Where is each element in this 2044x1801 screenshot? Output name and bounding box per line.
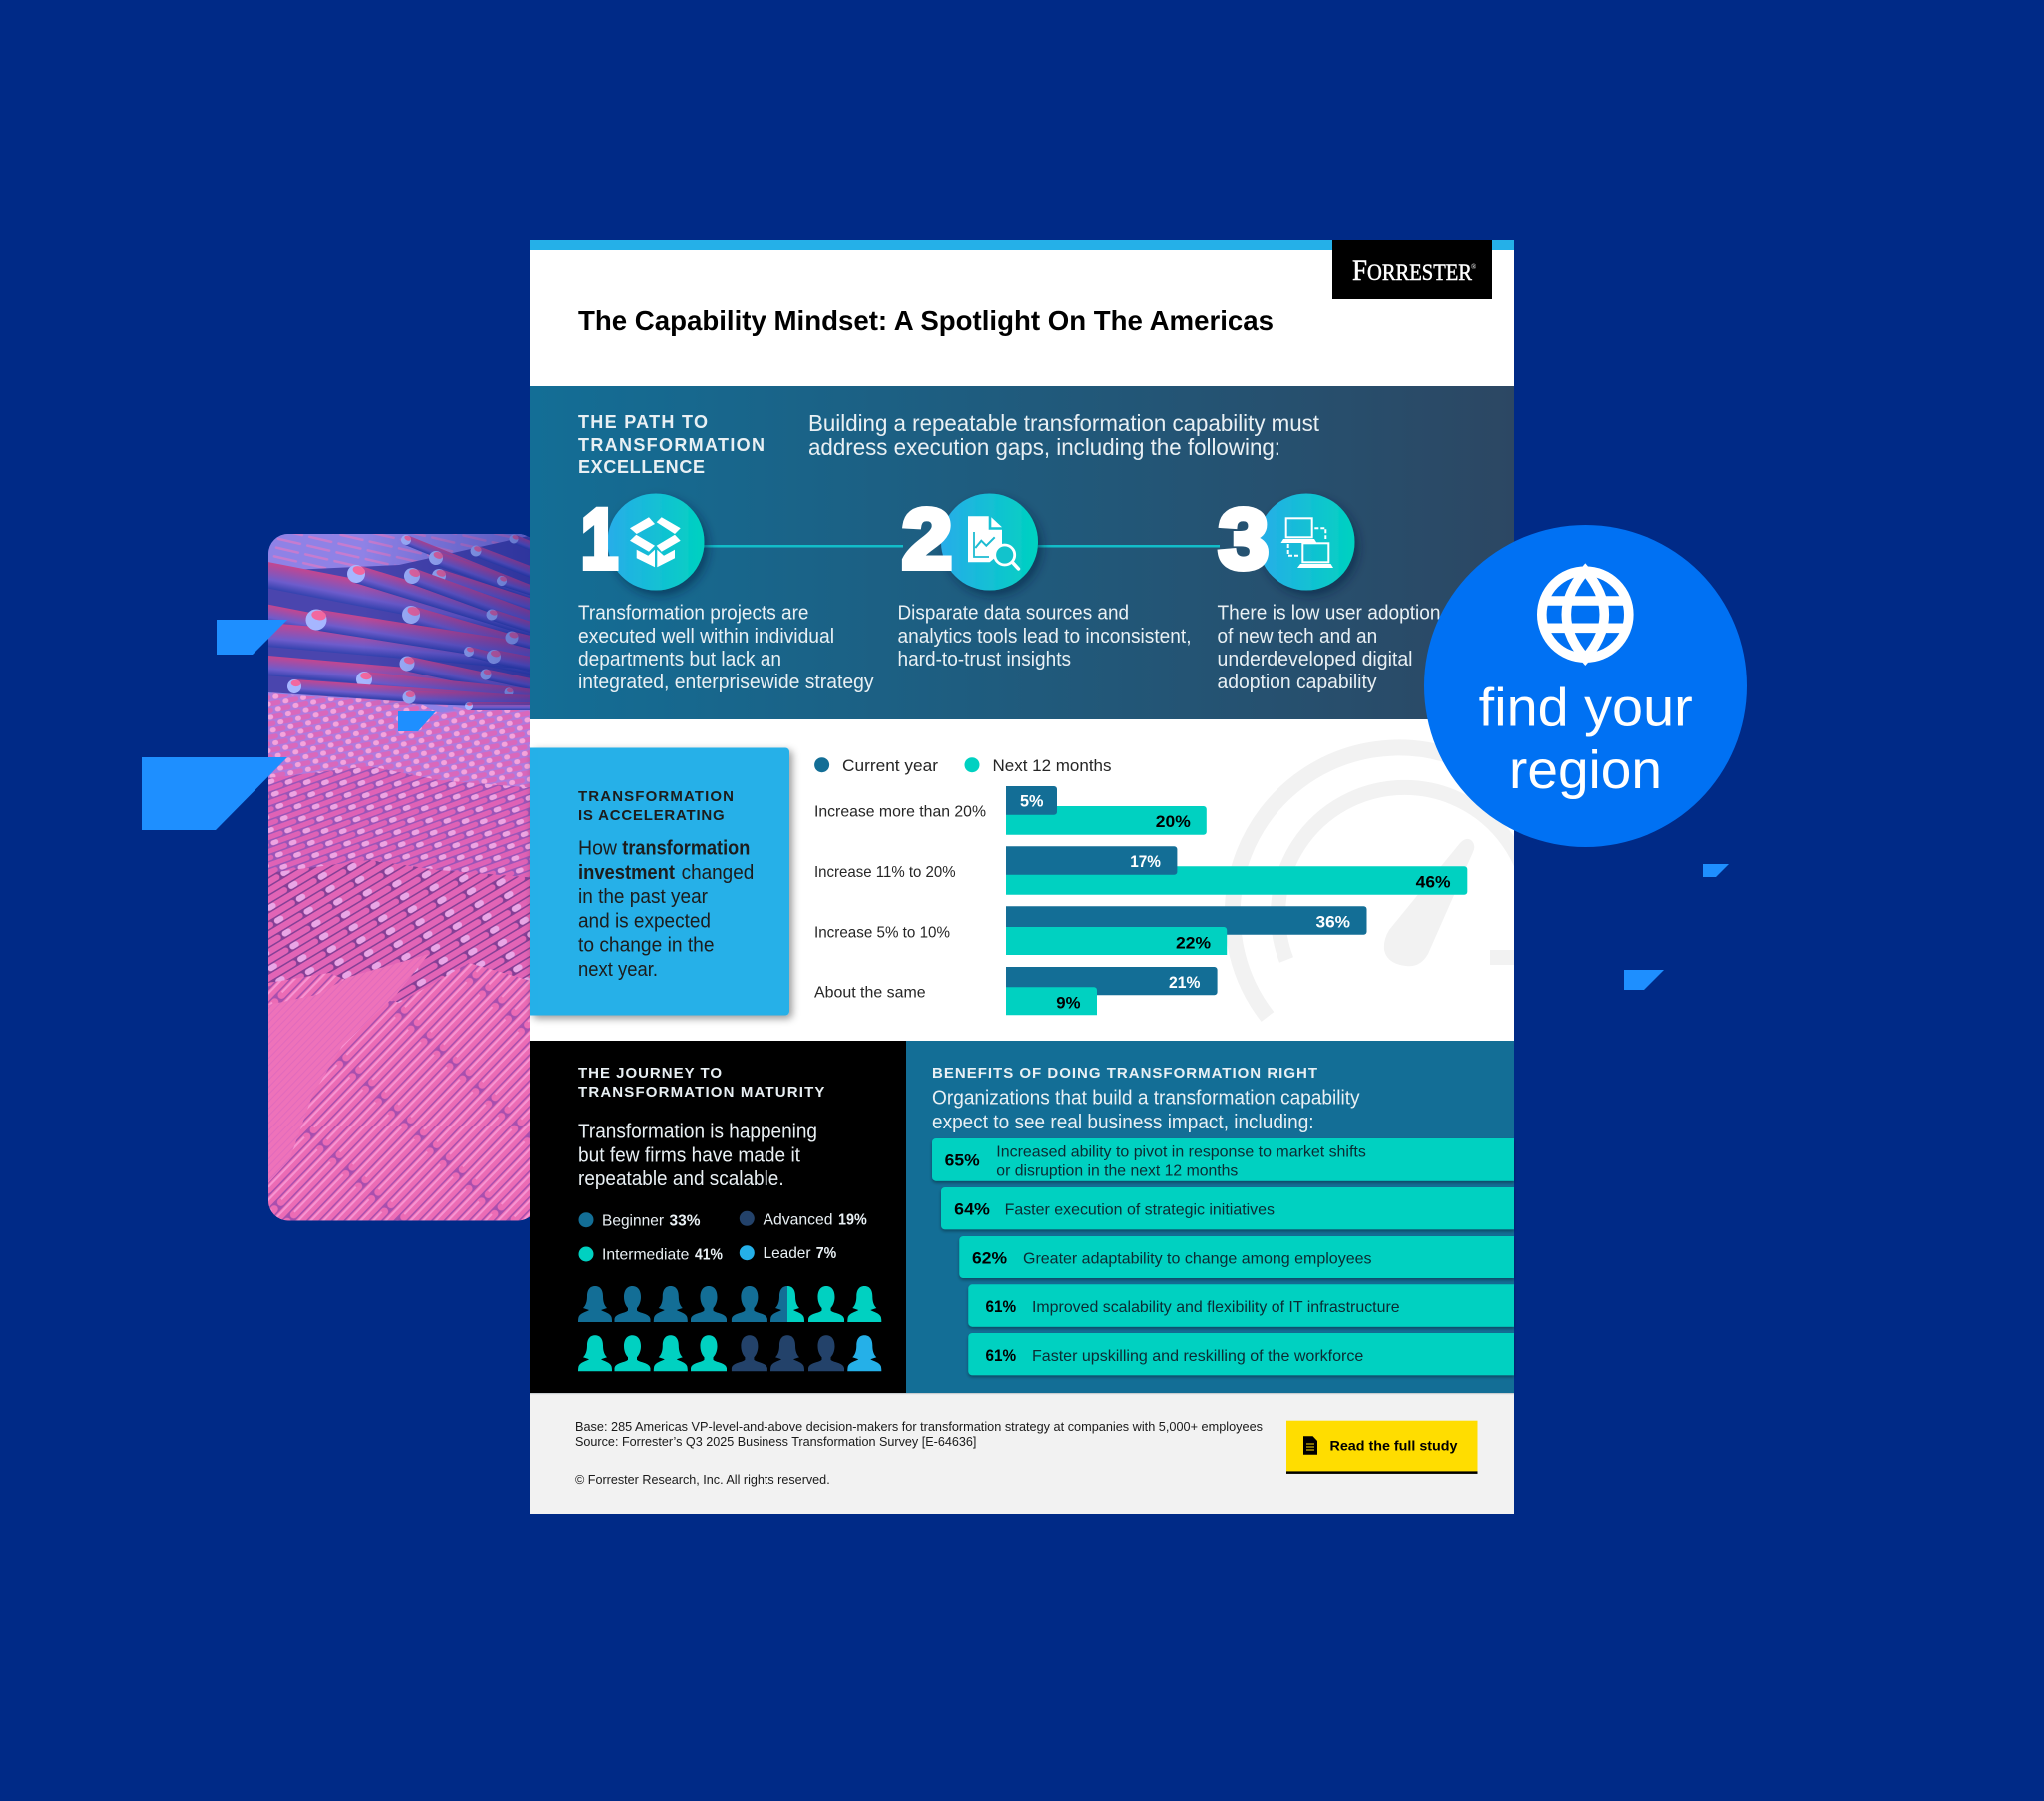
report card [530,240,1566,1514]
step 3 number: 3 [1219,492,1269,586]
people pictogram [578,1286,881,1371]
panel: benefits of doing transformation right [906,1041,1514,1394]
benefit 61% scalability: Improved scalability and flexibility of IT infrastructure [1032,1299,1400,1316]
footnotes: Base: 285 Americas VP-level-and-above decision-makers for transformation strategy at companies with 5,000+ employees [575,1420,1263,1434]
panel heading: TRANSFORMATION [578,788,734,805]
title: The Capability Mindset: A Spotlight On The Americas [578,305,1274,336]
benefit 65%: or disruption in the next 12 months [996,1162,1238,1179]
maturity legend: Beginner [602,1212,665,1229]
benefit 61% scalability [968,1284,1514,1327]
panel heading: THE PATH TO [578,412,708,432]
step 3 text: of new tech and an [1218,626,1377,648]
maturity legend: 7% [816,1245,836,1262]
step 1 text: Transformation projects are [578,603,808,625]
row: increase 5% to 10% [1006,906,1367,955]
panel body text: repeatable and scalable. [578,1168,784,1190]
panel intro text: expect to see real business impact, including: [932,1112,1314,1133]
panel body text [578,1122,817,1190]
step 2 number: 2 [902,492,952,586]
step 1 text [578,603,874,693]
panel: path to transformation excellence [530,386,1514,719]
row: increase more than 20%: 5% [1020,792,1044,811]
decorative blue arrow shapes left [142,620,436,830]
benefit 61% scalability: 61% [986,1297,1016,1316]
step 1 text: integrated, enterprisewide strategy [578,672,874,693]
infographic page [142,240,1747,1514]
panel: journey to transformation maturity [530,1041,906,1394]
panel heading: IS ACCELERATING [578,807,725,824]
benefit 62%: 62% [972,1248,1007,1267]
category labels: Increase 5% to 10% [814,924,950,941]
step 3 text: There is low user adoption [1218,603,1441,625]
category labels: About the same [814,984,926,1001]
benefit 65%: 65% [945,1151,980,1170]
panel body text: in the past year [578,886,708,908]
Forrester logo: ORRESTER [1367,260,1473,285]
row: increase 5% to 10%: 36% [1315,913,1350,932]
Forrester logo [1332,240,1492,299]
chart legend [814,756,1112,775]
panel body text: next year. [578,959,658,981]
icon: globe [1542,571,1629,659]
benefit 62% [959,1236,1514,1278]
maturity legend: 33% [669,1212,701,1229]
step 1 circle with box icon [607,493,705,591]
benefit 65%: Increased ability to pivot in response to market shifts [996,1143,1366,1160]
panel intro text: Organizations that build a transformation capability [932,1088,1360,1110]
Forrester logo: ® [1471,263,1477,271]
step 1 number: 1 [581,492,618,586]
decorative blue arrow shapes right [1624,864,1729,990]
row: increase 11% to 20%: 46% [1416,873,1451,892]
panel heading: BENEFITS OF DOING TRANSFORMATION RIGHT [932,1065,1317,1082]
panel heading: EXCELLENCE [578,457,705,477]
maturity legend: 41% [695,1246,723,1263]
panel body text: but few firms have made it [578,1145,800,1167]
step 2 text [898,603,1192,671]
panel heading [578,412,765,477]
maturity legend: Leader [763,1245,811,1262]
footer [530,1393,1514,1514]
panel body text: investment [578,862,675,884]
maturity legend: Advanced [763,1212,832,1229]
benefit 64%: Faster execution of strategic initiatives [1005,1201,1275,1218]
step 2 text: analytics tools lead to inconsistent, [898,626,1192,648]
row: increase 11% to 20% [1006,846,1467,895]
panel heading [578,1065,824,1101]
connector lines [704,545,1220,547]
step 3 text: underdeveloped digital [1218,649,1413,671]
category labels: Increase more than 20% [814,804,986,821]
panel heading: THE JOURNEY TO [578,1065,722,1082]
photo panel: pink and purple 3D rods [268,534,530,1221]
panel heading: TRANSFORMATION MATURITY [578,1084,824,1101]
benefit 61% upskilling: 61% [986,1346,1016,1365]
step 3 text: adoption capability [1218,672,1377,693]
benefit 61% upskilling [968,1333,1514,1375]
category labels: Increase 11% to 20% [814,864,956,881]
benefit 65% [932,1138,1514,1181]
step 1 text: executed well within individual [578,626,834,648]
Forrester logo: F [1352,254,1367,287]
panel body text: How [578,838,618,860]
badge label [1479,678,1693,800]
row: increase 11% to 20%: 17% [1130,852,1161,871]
intro text: address execution gaps, including the following: [808,434,1280,460]
row: about the same [1006,967,1218,1015]
row: about the same: 21% [1169,973,1200,992]
row: increase 5% to 10%: 22% [1176,933,1211,952]
chart legend: Current year [842,756,938,775]
maturity legend: 19% [838,1212,867,1229]
footnotes: © Forrester Research, Inc. All rights reserved. [575,1473,830,1487]
panel body text: to change in the [578,934,715,956]
step 3 circle with laptops icon [1258,493,1355,591]
card background [530,240,1514,1514]
panel body text: transformation [622,838,750,860]
panel intro text [932,1088,1360,1133]
button: read the full study: Read the full study [1329,1437,1458,1453]
step 2 text: Disparate data sources and [898,603,1129,625]
benefit 64% [941,1187,1514,1229]
panel: transformation is accelerating [530,748,789,1016]
step 2 circle with document icon [941,493,1038,591]
panel body text: changed [682,862,754,884]
row: increase more than 20% [1006,786,1207,835]
bar chart: transformation investment [814,786,1467,1015]
intro text [808,410,1320,460]
row: increase more than 20%: 20% [1156,812,1191,831]
benefit 61% upskilling: Faster upskilling and reskilling of the workforce [1032,1348,1363,1365]
footnotes: Source: Forrester’s Q3 2025 Business Transformation Survey [E-64636] [575,1435,976,1449]
row: about the same: 9% [1056,994,1080,1013]
step 2 text: hard-to-trust insights [898,649,1071,671]
badge label: region [1509,740,1662,800]
category labels [814,804,986,1001]
top accent bar [530,240,1514,250]
chart legend: Next 12 months [992,756,1112,775]
panel body text: Transformation is happening [578,1122,817,1143]
step 1 text: departments but lack an [578,649,781,671]
footnotes [575,1420,1263,1487]
intro text: Building a repeatable transformation capability must [808,410,1320,436]
badge label: find your [1479,678,1693,738]
benefit 62%: Greater adaptability to change among employees [1023,1250,1371,1267]
panel heading [578,788,734,824]
panel body text [578,838,754,981]
speedometer watermark [1233,747,1566,1017]
benefit 64%: 64% [954,1199,990,1218]
panel heading: TRANSFORMATION [578,435,765,455]
maturity legend: Intermediate [602,1246,689,1263]
find your region badge [1424,525,1747,847]
panel body text: and is expected [578,910,711,932]
button: read the full study [1286,1421,1477,1474]
maturity legend [579,1211,867,1263]
step 3 text [1218,603,1441,693]
